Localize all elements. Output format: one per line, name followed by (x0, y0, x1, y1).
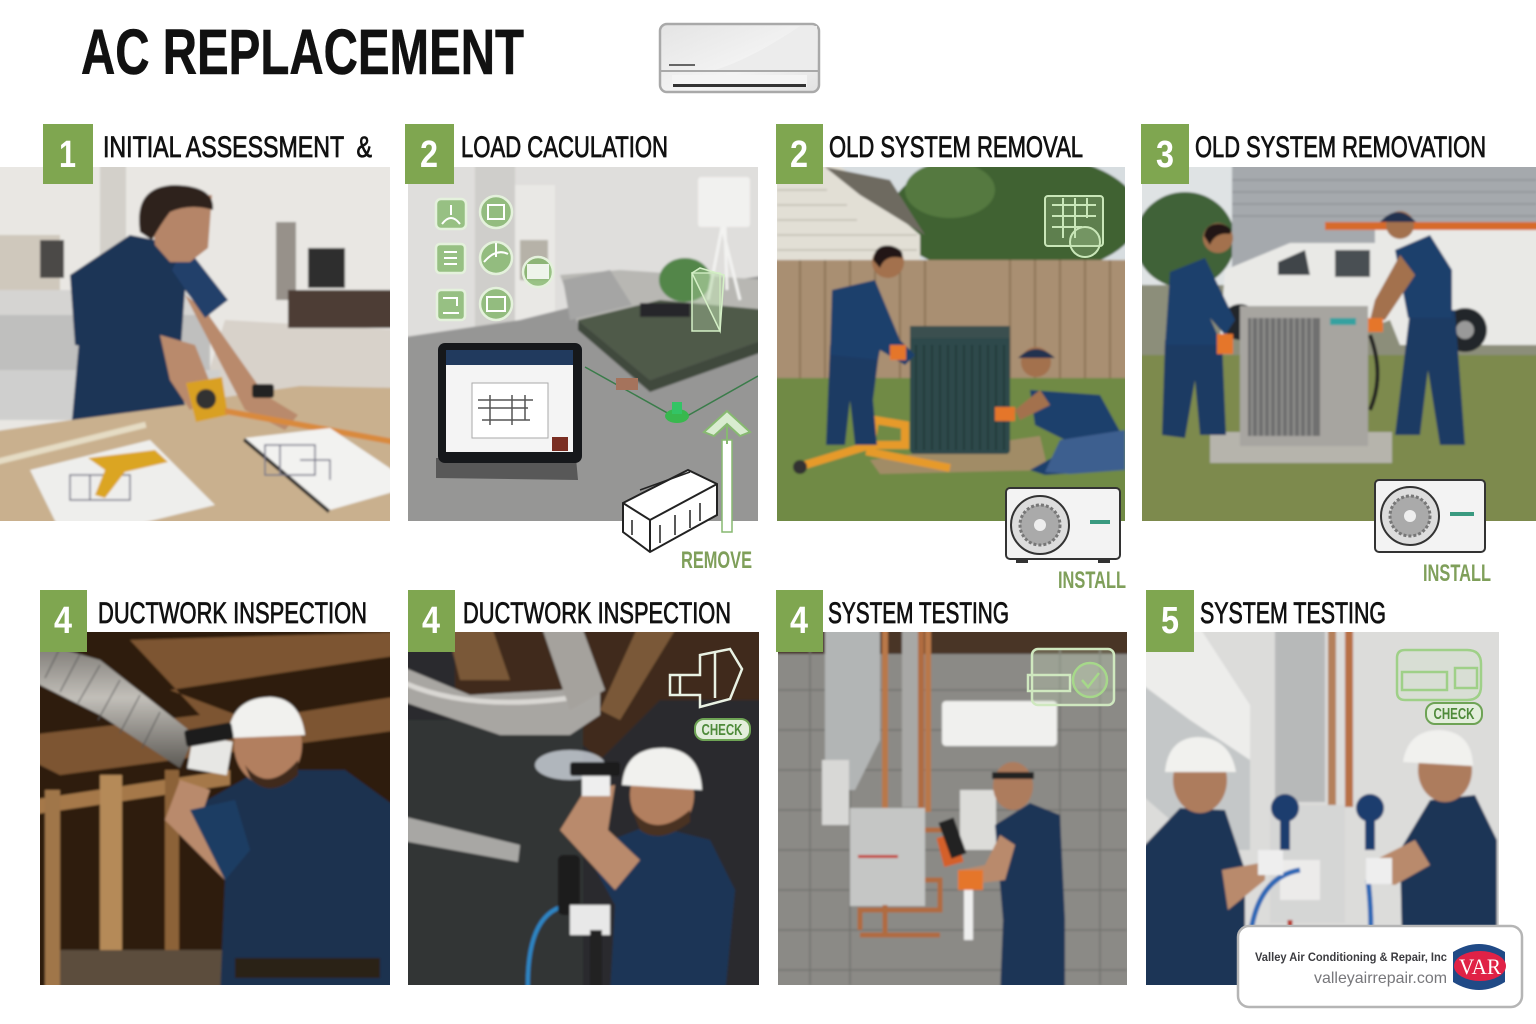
panel 8: system testing with two technicians (1136, 590, 1509, 995)
tablet (438, 343, 582, 463)
floating green icons (436, 196, 553, 320)
step badge 2 (776, 124, 823, 184)
icon: new outdoor unit (1375, 480, 1485, 552)
unit (910, 326, 1010, 454)
left person (1140, 808, 1245, 995)
photo: two technicians with gauges at furnace (1146, 632, 1499, 985)
photo: technician with flashlight and hose below ducts (408, 632, 759, 985)
icon: old unit line drawing (623, 470, 717, 552)
step badge 4: 4 (790, 600, 808, 642)
heading: load calculation: LOAD CACULATION (461, 131, 668, 164)
heading: old system removal: OLD SYSTEM REMOVAL (829, 131, 1083, 164)
heading: ductwork inspection: DUCTWORK INSPECTION (463, 597, 731, 630)
heading: initial assessment: INITIAL ASSESSMENT & (103, 131, 372, 164)
label: remove: REMOVE (681, 547, 752, 574)
company card (1238, 926, 1522, 1007)
dolly (795, 420, 950, 468)
left worker (826, 345, 880, 445)
photo: tablet with floor plan in a living room (408, 167, 758, 521)
heading: ductwork inspection: DUCTWORK INSPECTION (98, 597, 367, 630)
step badge 4 (776, 590, 823, 652)
photo: technician inspecting attic duct with flashlight (40, 632, 390, 985)
panel 6: ductwork inspection with tools (398, 590, 769, 995)
label: install: INSTALL (1058, 567, 1126, 594)
floor lines and marker (585, 367, 758, 423)
label: install: INSTALL (1423, 560, 1491, 587)
right worker (1395, 310, 1465, 445)
person (596, 828, 736, 985)
step badge 2: 2 (790, 134, 808, 176)
step badge 2 (405, 124, 454, 184)
label: check (1426, 703, 1482, 724)
photo: two technicians removing an outdoor unit by a fence (777, 167, 1125, 521)
icon: duct fitting (670, 649, 742, 707)
photo: technician measuring at a living room table (0, 157, 400, 531)
step badge 4: 4 (422, 600, 440, 642)
step badge 1 (43, 124, 93, 184)
photo: technician testing furnace against block wall (778, 632, 1127, 985)
label: check: CHECK (702, 722, 743, 739)
right worker (1030, 390, 1122, 475)
title: AC REPLACEMENT (81, 16, 524, 88)
heading: system testing: SYSTEM TESTING (828, 597, 1009, 630)
step badge 3: 3 (1156, 134, 1174, 176)
panel 1: initial assessment (0, 124, 400, 531)
icon: new outdoor unit (1006, 488, 1120, 563)
hologram grid icon (1045, 196, 1103, 257)
label: check (695, 719, 750, 740)
company website: valleyairrepair.com (1314, 970, 1447, 987)
panel 2: load calculation (398, 124, 768, 574)
tablet base (436, 458, 578, 480)
step badge 4 (40, 590, 87, 652)
hologram valve check icon (1028, 649, 1114, 705)
panel 3: old system removal (767, 124, 1140, 594)
person (204, 768, 390, 985)
company name: Valley Air Conditioning & Repair, Inc (1255, 950, 1447, 964)
step badge 2: 2 (420, 134, 438, 176)
photo: two technicians with new unit and truck (1132, 157, 1536, 531)
heading: system testing: SYSTEM TESTING (1200, 597, 1386, 630)
left worker (1162, 340, 1226, 438)
hologram unit (692, 268, 724, 331)
label: check: CHECK (1434, 706, 1475, 723)
step badge 5 (1146, 590, 1194, 652)
person (995, 803, 1065, 995)
person (70, 344, 186, 422)
right person (1399, 794, 1498, 925)
step badge 4 (408, 590, 455, 652)
step badge 3 (1141, 124, 1189, 184)
panel 4: old system renovation (1132, 124, 1536, 587)
step badge 5: 5 (1161, 600, 1179, 642)
step badge 4: 4 (54, 600, 72, 642)
panel 7: system testing (768, 590, 1137, 995)
icon: wall-mounted air conditioner (660, 24, 819, 92)
tools and documents (186, 377, 228, 422)
icon: valve hologram (1397, 650, 1481, 700)
step badge 1: 1 (59, 134, 76, 176)
company logo (1453, 944, 1506, 990)
panel 5: ductwork inspection in attic (30, 590, 400, 995)
icon: removal arrow (704, 411, 750, 532)
company logo: VAR (1459, 954, 1501, 979)
